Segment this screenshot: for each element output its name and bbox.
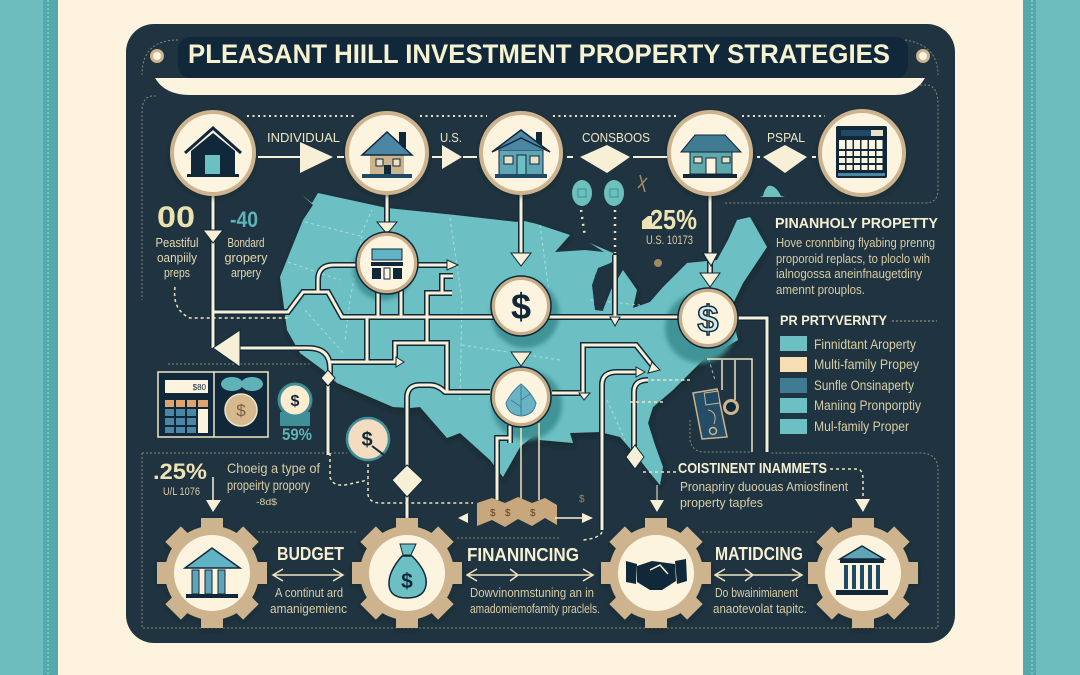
title banner xyxy=(150,37,930,95)
icon: bank xyxy=(185,548,240,598)
top row labels: INDIVIDUAL xyxy=(267,131,340,145)
left teal side strip xyxy=(0,0,58,675)
lower left stats: .25% xyxy=(153,459,207,484)
step 5 circle: calendar xyxy=(820,111,904,195)
top row labels: PSPAL xyxy=(767,131,805,145)
folded money bills: $ xyxy=(579,494,585,505)
lower left stats: propeirty propory xyxy=(227,477,310,493)
step label: budget xyxy=(270,544,347,616)
text block: consistent investments: COISTINENT INAMMETS xyxy=(678,460,827,477)
icon: calendar xyxy=(836,126,887,178)
main dark panel xyxy=(126,24,955,643)
text block: consistent investments: property tapfes xyxy=(680,495,763,510)
right teal side strip xyxy=(1023,0,1080,675)
lower left stats: U/L 1076 xyxy=(163,486,200,498)
map circle shadows xyxy=(353,240,735,440)
dollar circle centre: $ xyxy=(511,286,531,327)
dark title bar xyxy=(178,37,908,78)
thin map connectors xyxy=(521,359,752,500)
dotted rules xyxy=(247,115,825,117)
step 3 circle: blue house xyxy=(481,113,561,193)
step label: matching: MATIDCING xyxy=(715,544,803,564)
text block: consistent investments: Pronapriry duoouas Amiosfinent xyxy=(680,479,848,494)
lower left stats: -8d$ xyxy=(256,497,277,507)
step label: financing xyxy=(467,545,600,616)
text block: property description xyxy=(775,215,938,297)
text block: property description: amennt prouplos. xyxy=(776,282,865,297)
step 4 circle: teal house xyxy=(669,112,751,194)
legend item 1: Finnidtant Aroperty xyxy=(814,336,916,352)
top row arrows xyxy=(258,142,816,173)
icon: shop xyxy=(371,249,403,279)
step label: financing: amadomiemofamity praclels. xyxy=(470,601,600,616)
folded money bills: $ xyxy=(530,508,536,519)
left stats xyxy=(156,201,268,280)
coin with 59 percent: $ xyxy=(291,393,300,410)
dollar circle right xyxy=(678,288,738,348)
step 1 circle: house xyxy=(172,112,254,194)
dollar circle centre xyxy=(491,276,551,336)
folded money bills: $ xyxy=(490,508,496,519)
small teal medals and marks xyxy=(572,175,785,267)
title: PLEASANT HIILL INVESTMENT PROPERTY STRATEGIES xyxy=(188,39,890,69)
legend: PR PRTYVERNTY xyxy=(780,312,888,328)
folded money bills: $ xyxy=(505,508,511,519)
text block: property description: Hove cronnbing flyabing prenng xyxy=(776,235,935,250)
step label: matching xyxy=(713,544,807,616)
cream ribbon xyxy=(155,78,925,95)
left stats: -40 xyxy=(230,207,258,232)
step label: financing: FINANINCING xyxy=(467,545,579,565)
step label: budget: BUDGET xyxy=(277,544,344,564)
coin with 59 percent: 59% xyxy=(282,425,312,444)
icon: blue house xyxy=(492,130,550,178)
gear: handshake xyxy=(601,518,711,628)
25% stat top xyxy=(642,204,697,247)
25% stat top: U.S. 10173 xyxy=(646,235,693,247)
step 2 circle: small house xyxy=(347,113,427,193)
coin with 59 percent xyxy=(279,384,312,444)
legend item 4: Maniing Pronporptiy xyxy=(814,397,921,413)
legend item 3 xyxy=(780,377,914,393)
icon: calculator: $80 xyxy=(193,383,207,392)
legend item 5: Mul-family Proper xyxy=(814,418,909,434)
arrows into gears xyxy=(206,477,870,512)
calculator and coin box xyxy=(158,372,268,437)
icon: wide house xyxy=(681,135,741,178)
top row labels: CONSBOOS xyxy=(582,131,650,145)
text block: property description: PINANHOLY PROPETTY xyxy=(775,215,938,232)
left stats: gropery xyxy=(224,250,268,265)
map state borders xyxy=(288,210,715,440)
left stats: 00 xyxy=(157,201,195,234)
left stats: Bondard xyxy=(228,235,264,250)
legend item 4 xyxy=(780,397,921,413)
text block: consistent investments xyxy=(678,460,848,510)
legend item 2: Multi-family Propey xyxy=(814,356,919,372)
icon: coin with domes: $ xyxy=(236,401,246,420)
icon: leaf xyxy=(506,384,536,416)
step label: budget: amanigemienc xyxy=(270,601,347,616)
dashed flow lines xyxy=(175,210,863,540)
icon: money bag: $ xyxy=(401,570,413,593)
small map circle: storefront xyxy=(356,232,418,294)
step label: matching: anaotevolat tapitc. xyxy=(713,601,807,616)
lower left stats xyxy=(153,459,320,507)
coin with magnifier xyxy=(347,418,389,460)
lakes xyxy=(555,243,613,311)
left stats: oanpiily xyxy=(157,250,197,265)
flow network connectors xyxy=(203,194,767,530)
gear: money bag xyxy=(352,518,462,628)
money flow arrows xyxy=(458,513,593,523)
decorative dashed frames xyxy=(142,40,938,628)
icon: building xyxy=(836,546,888,595)
step label: budget: A continut ard xyxy=(275,585,343,600)
legend item 5 xyxy=(780,418,909,434)
step label: financing: Dowvinonmstuning an in xyxy=(470,585,594,600)
step label: matching: Do bwainimianent xyxy=(715,585,798,600)
top row labels xyxy=(247,116,825,145)
icon: house xyxy=(185,128,241,177)
legend item 2 xyxy=(780,356,919,372)
lower left stats: Choeig a type of xyxy=(227,460,320,476)
USA map xyxy=(280,193,767,485)
icon: tan house xyxy=(362,132,412,178)
gear: government building xyxy=(808,518,918,628)
dollar circle right: $ xyxy=(697,299,719,341)
left stats: preps xyxy=(164,265,190,280)
text block: property description: ialnogossa aneinfnaugetdiny xyxy=(776,266,922,281)
25% stat top: 25% xyxy=(650,204,697,235)
legend item 3: Sunfle Onsinaperty xyxy=(814,377,914,393)
legend item 1 xyxy=(780,336,916,352)
rivets xyxy=(150,49,930,63)
folded money bills xyxy=(477,494,585,527)
icon: handshake xyxy=(626,559,687,590)
top row labels: U.S. xyxy=(440,131,462,145)
legend xyxy=(780,312,937,434)
left stats: Peastiful xyxy=(156,235,199,250)
gear: bank xyxy=(157,518,267,628)
text block: property description: proporoid replacs, to ploclo wih xyxy=(776,251,930,266)
leaf circle xyxy=(491,367,551,427)
arrowheads xyxy=(203,222,720,497)
coin with magnifier: $ xyxy=(361,429,373,451)
icon: wallet and cards xyxy=(693,389,738,439)
left stats: arpery xyxy=(231,265,261,280)
